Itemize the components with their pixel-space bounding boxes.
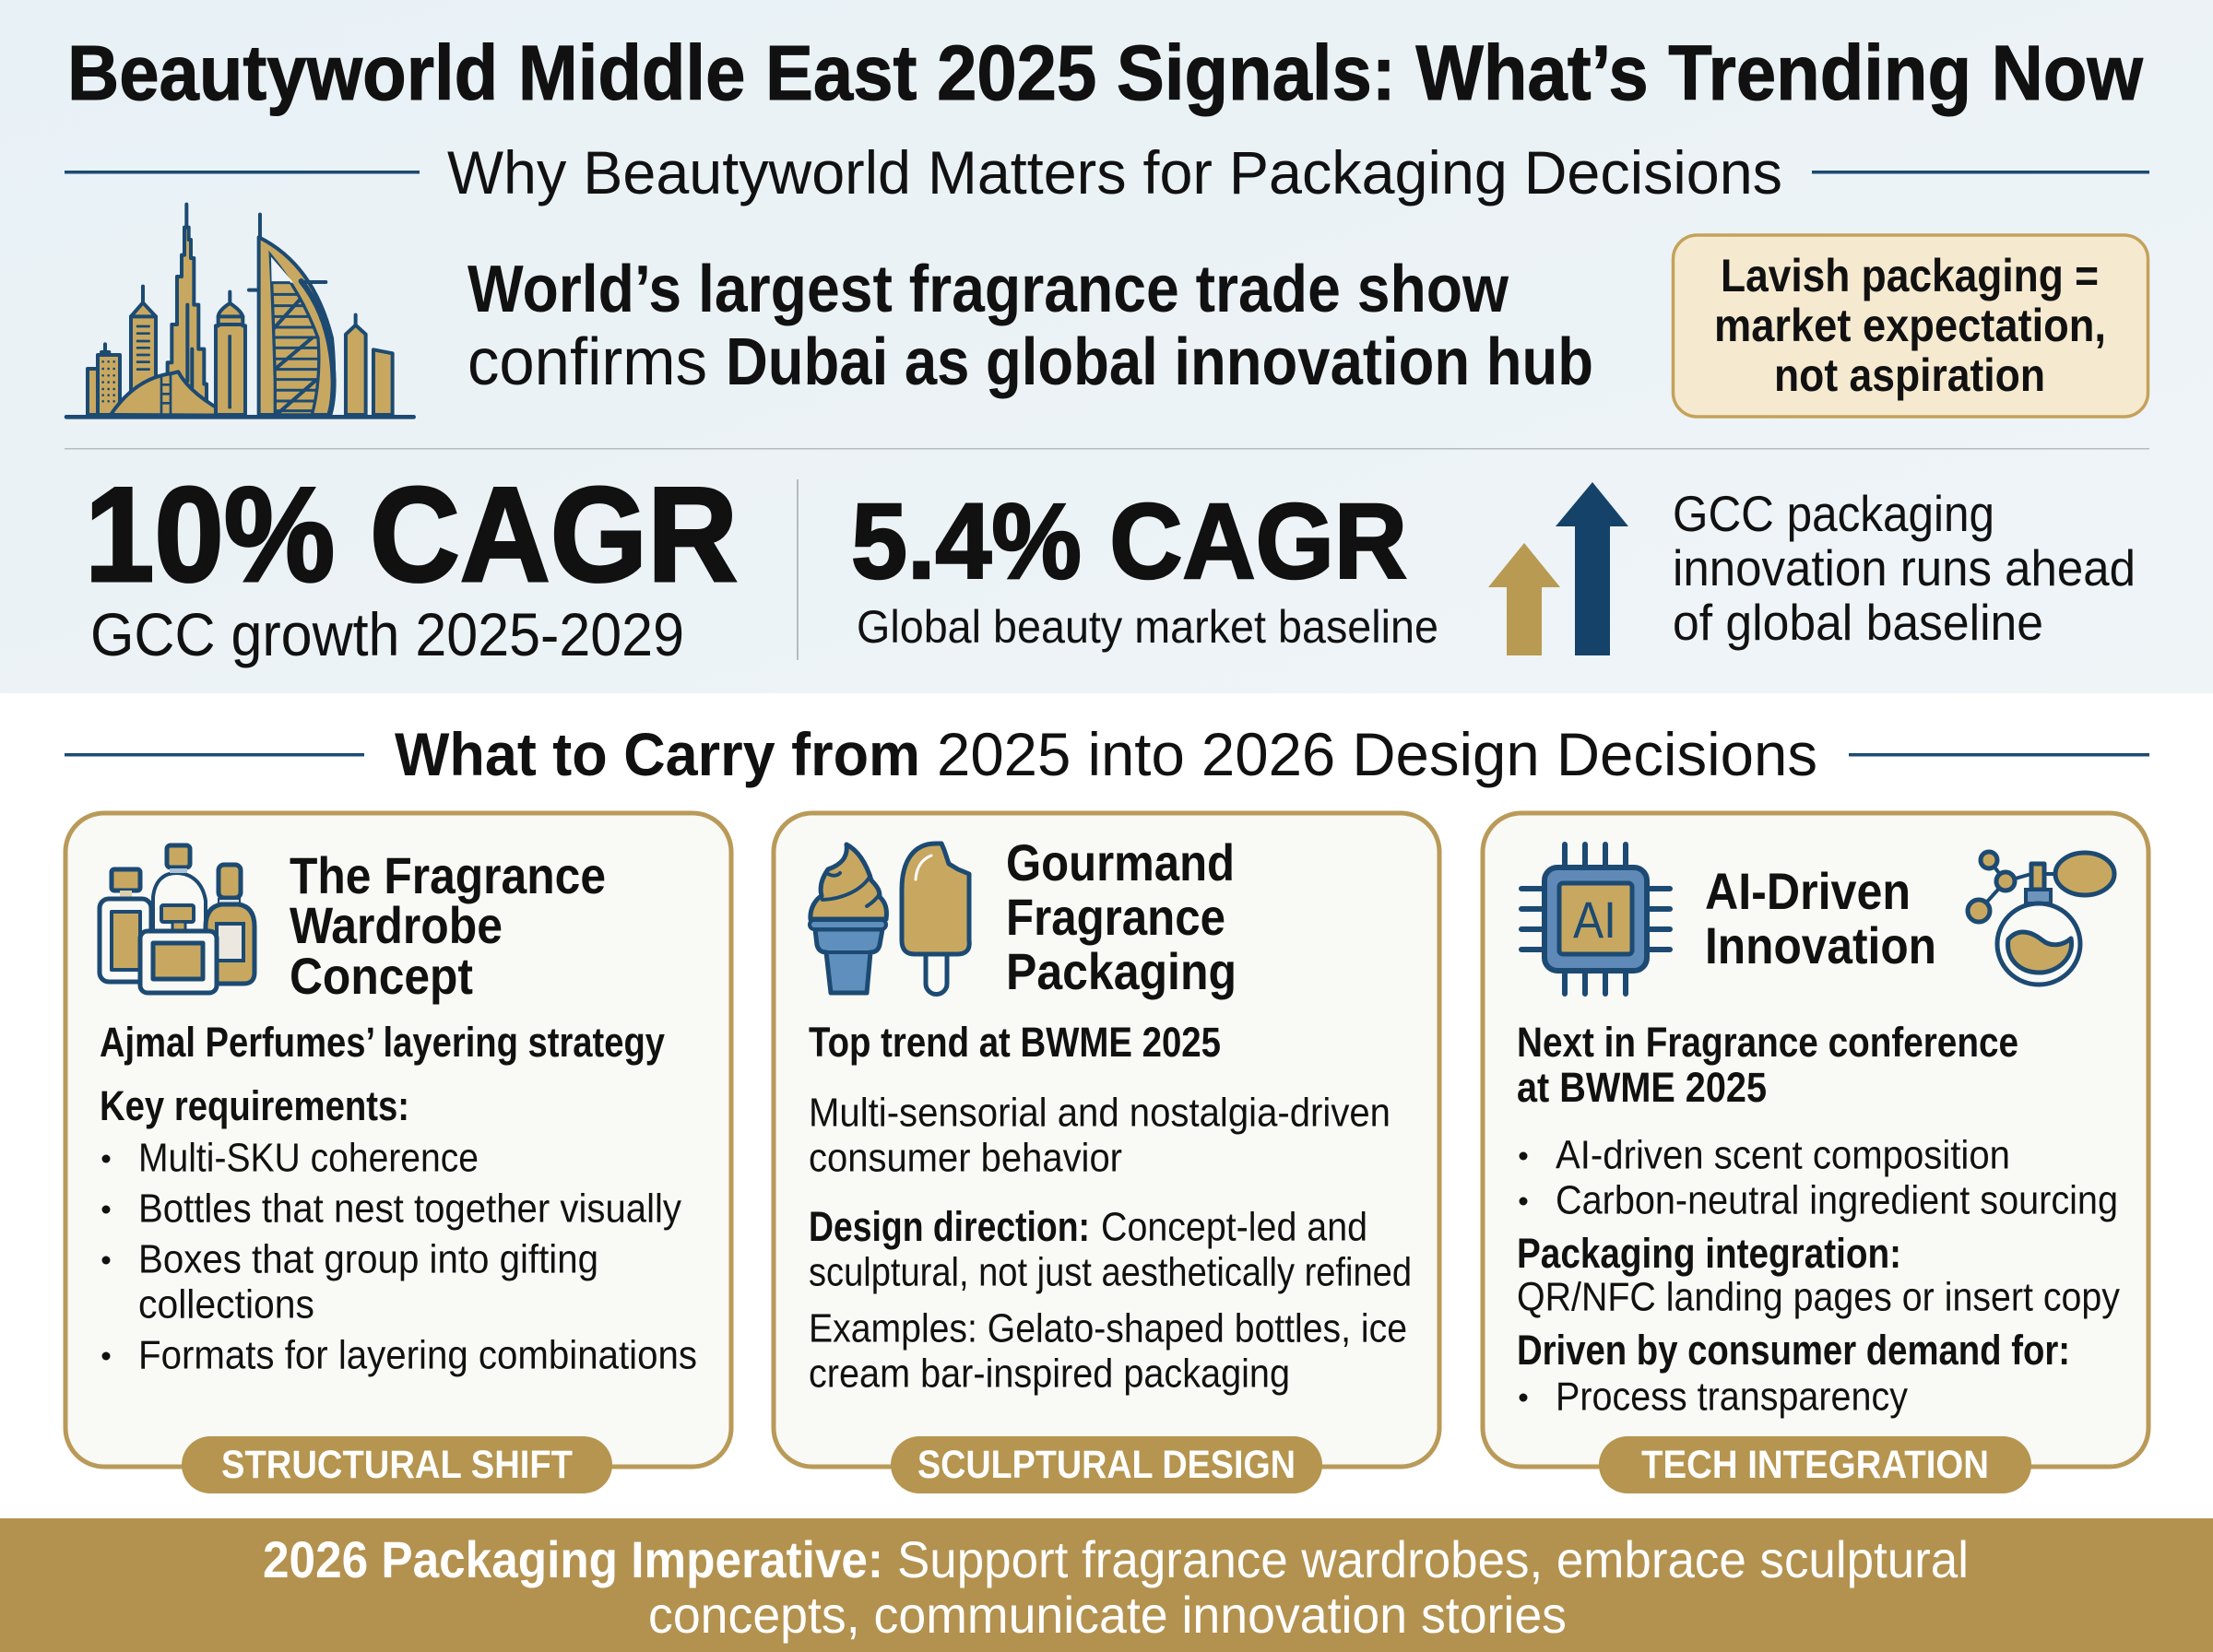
footer banner: 2026 packaging imperative: 2026 Packaging Imperative: xyxy=(263,1530,883,1588)
footer banner: 2026 packaging imperative xyxy=(0,1518,2213,1652)
card title: Wardrobe xyxy=(290,896,503,954)
card body text: Top trend at BWME 2025 xyxy=(809,1019,1221,1066)
stat: 5.4% CAGR: Global beauty market baseline xyxy=(857,601,1438,653)
stat: 10% CAGR: 10% CAGR xyxy=(85,459,738,609)
panel: gourmand packaging xyxy=(774,813,1439,1493)
callout: lavish packaging: Lavish packaging = xyxy=(1721,250,2099,301)
panel: fragrance wardrobe xyxy=(65,813,731,1493)
card body text: Formats for layering combinations xyxy=(138,1333,697,1377)
card body text: Multi-SKU coherence xyxy=(138,1136,479,1180)
card title xyxy=(1006,833,1237,1000)
card body text: Process transparency xyxy=(1556,1374,1908,1420)
headline text: World’s largest fragrance trade show xyxy=(467,253,1509,326)
card body text: sculptural, not just aesthetically refined xyxy=(809,1250,1412,1294)
footer banner: 2026 packaging imperative: concepts, communicate innovation stories xyxy=(648,1586,1567,1644)
card title xyxy=(1705,862,1936,974)
card body text: Multi-sensorial and nostalgia-driven xyxy=(809,1090,1391,1136)
icon: perfume bottles xyxy=(100,845,254,993)
icon: AI chip xyxy=(1521,844,1670,994)
text: GCC packaging note: innovation runs ahead xyxy=(1673,539,2136,596)
text: GCC packaging note xyxy=(1673,485,2136,651)
icon: AI perfume atomizer xyxy=(1968,852,2114,985)
card body text: consumer behavior xyxy=(809,1136,1122,1180)
tag: tech integration: TECH INTEGRATION xyxy=(1641,1443,1989,1487)
panel: AI-driven innovation xyxy=(1483,813,2148,1493)
section heading: why Beautyworld matters: Why Beautyworld Matters for Packaging Decisions xyxy=(447,138,1782,206)
card title: AI-Driven xyxy=(1705,862,1911,920)
card title: Concept xyxy=(290,947,473,1005)
callout: lavish packaging xyxy=(1673,235,2148,417)
card title: Gourmand xyxy=(1006,833,1235,891)
icon: ice cream and bar xyxy=(810,844,969,994)
card body text xyxy=(100,1019,697,1377)
card body text: collections xyxy=(138,1281,314,1328)
stat: 10% CAGR: GCC growth 2025-2029 xyxy=(90,600,684,668)
card title: Innovation xyxy=(1705,916,1936,974)
card body text xyxy=(809,1019,1412,1396)
panel: why Beautyworld matters xyxy=(0,0,2213,693)
card body text: Design direction: xyxy=(809,1203,1090,1250)
card title: Packaging xyxy=(1006,942,1237,1000)
card title xyxy=(290,846,606,1005)
section heading: why Beautyworld matters xyxy=(65,138,2149,206)
text: GCC packaging note: of global baseline xyxy=(1673,594,2043,651)
card body text: Ajmal Perfumes’ layering strategy xyxy=(100,1019,665,1066)
section heading: what to carry: What to Carry from xyxy=(395,720,920,788)
tag: sculptural design xyxy=(891,1436,1322,1493)
tag: structural shift xyxy=(182,1436,612,1493)
card body text: Bottles that nest together visually xyxy=(138,1186,681,1232)
card body text: Concept-led and xyxy=(1101,1204,1367,1250)
footer banner: 2026 packaging imperative: Support fragrance wardrobes, embrace sculptural xyxy=(897,1530,1969,1588)
card body text: Next in Fragrance conference xyxy=(1517,1019,2018,1066)
card body text: cream bar-inspired packaging xyxy=(809,1351,1290,1396)
tag: sculptural design: SCULPTURAL DESIGN xyxy=(917,1443,1296,1487)
headline text xyxy=(467,253,1593,399)
headline text: Dubai as global innovation hub xyxy=(726,325,1593,399)
card body text: Key requirements: xyxy=(100,1082,409,1129)
section heading: what to carry xyxy=(65,720,2149,788)
card body text: Boxes that group into gifting xyxy=(138,1237,598,1281)
card title: The Fragrance xyxy=(290,846,606,904)
icon: Dubai skyline xyxy=(66,205,414,417)
callout: lavish packaging: market expectation, xyxy=(1714,300,2106,351)
card body text: Packaging integration: xyxy=(1517,1230,1901,1277)
section heading: what to carry: 2025 into 2026 Design Decisions xyxy=(937,720,1817,788)
card body text: Carbon-neutral ingredient sourcing xyxy=(1556,1178,2118,1222)
card body text: Driven by consumer demand for: xyxy=(1517,1327,2070,1374)
stat: 5.4% CAGR: 5.4% CAGR xyxy=(851,481,1407,601)
card body text: AI-driven scent composition xyxy=(1556,1132,2010,1178)
stat: 10% CAGR xyxy=(85,459,738,668)
card title: Fragrance xyxy=(1006,888,1225,946)
arrows: growth comparison xyxy=(1488,482,1628,655)
icon: AI chip: AI xyxy=(1573,891,1616,949)
stat: 5.4% CAGR xyxy=(851,481,1438,653)
text: GCC packaging note: GCC packaging xyxy=(1673,485,1994,542)
card body text: QR/NFC landing pages or insert copy xyxy=(1517,1274,2120,1320)
card body text: at BWME 2025 xyxy=(1517,1064,1767,1111)
tag: tech integration xyxy=(1599,1436,2031,1493)
headline text: confirms xyxy=(467,325,707,399)
card body text xyxy=(1517,1019,2120,1420)
card body text: Examples: Gelato-shaped bottles, ice xyxy=(809,1305,1407,1351)
callout: lavish packaging: not aspiration xyxy=(1774,349,2045,401)
tag: structural shift: STRUCTURAL SHIFT xyxy=(221,1443,573,1487)
